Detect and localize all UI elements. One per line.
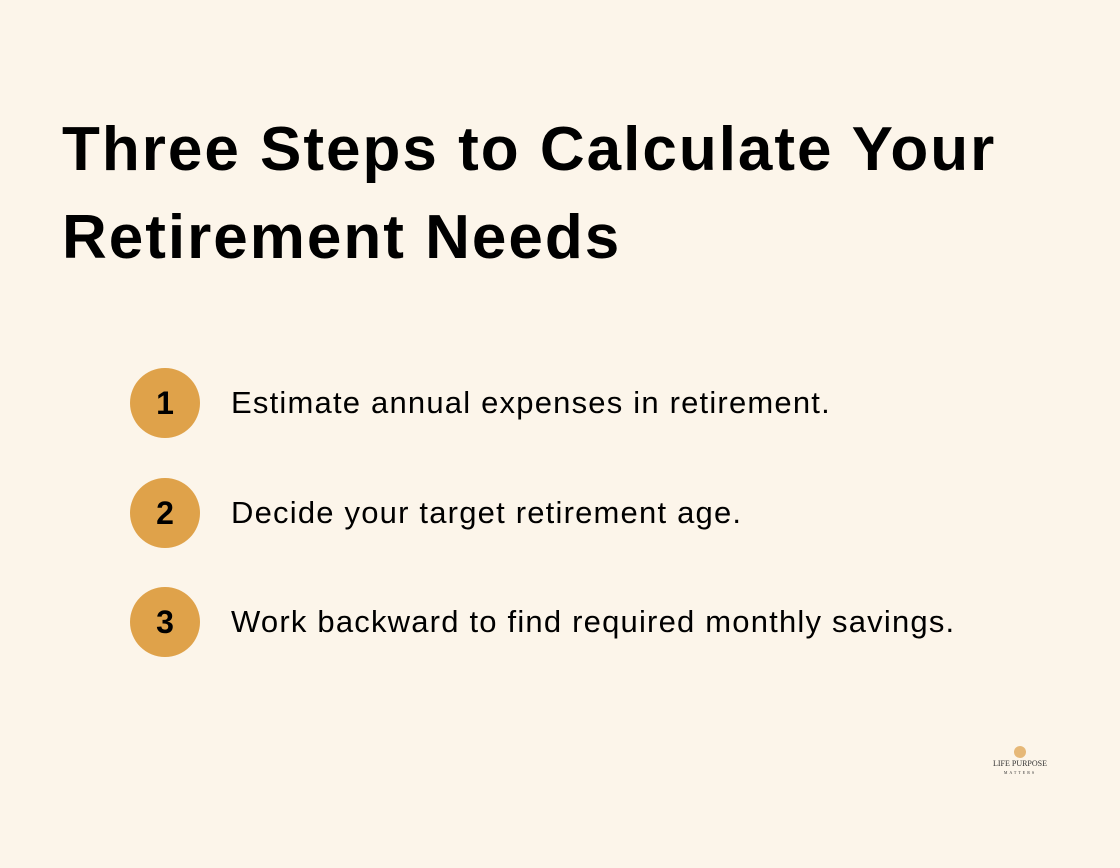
step 2 [130, 478, 742, 548]
step 3 text: Work backward to find required monthly savings. [231, 604, 955, 639]
badge 3 [130, 587, 200, 657]
badge 1: 1 [156, 385, 174, 421]
step 1 [130, 368, 831, 438]
icon: tree [1014, 746, 1026, 758]
badge 1 [130, 368, 200, 438]
badge 2 [130, 478, 200, 548]
badge 2: 2 [156, 495, 174, 531]
badge 3: 3 [156, 604, 174, 640]
title [62, 115, 996, 272]
logo: LIFE PURPOSE [993, 759, 1047, 768]
logo: MATTERS [1004, 770, 1036, 775]
title: Retirement Needs [62, 203, 621, 272]
title: Three Steps to Calculate Your [62, 115, 996, 184]
step 2 text: Decide your target retirement age. [231, 495, 742, 530]
step 1 text: Estimate annual expenses in retirement. [231, 385, 831, 420]
logo [993, 746, 1047, 775]
step 3 [130, 587, 955, 657]
